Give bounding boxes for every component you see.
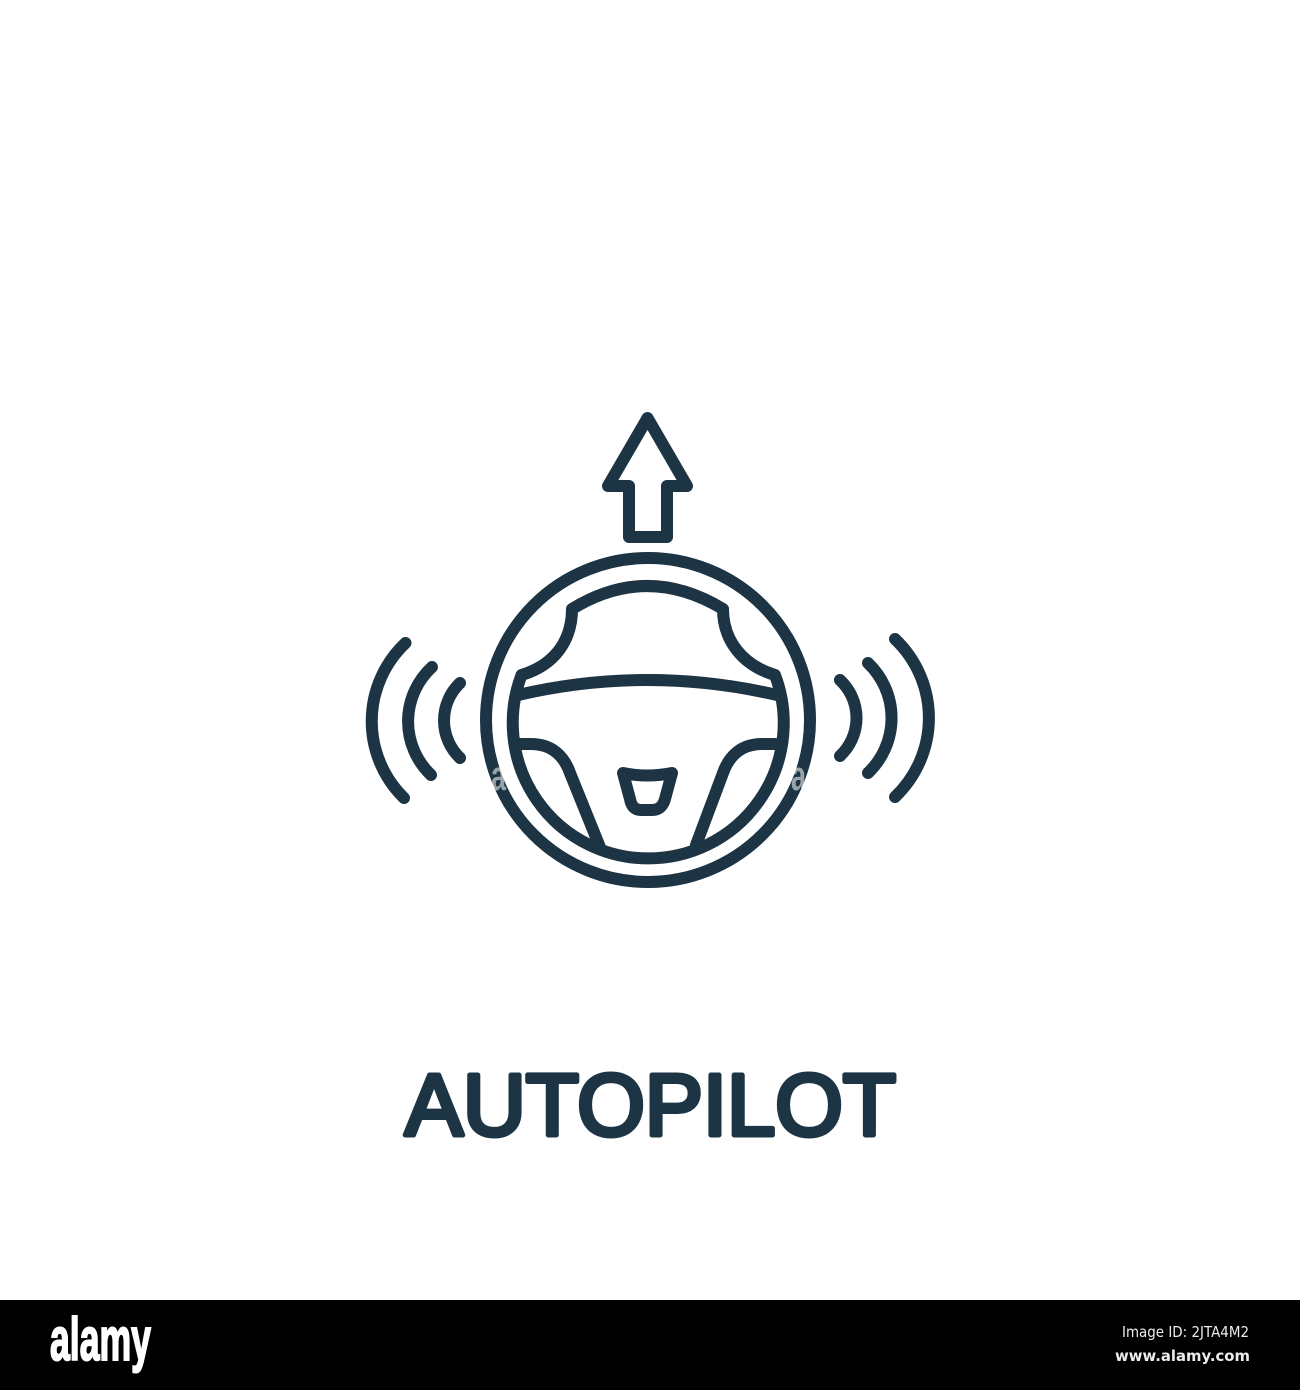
left spoke [518,744,600,846]
icon: autopilot steering wheel [372,418,929,882]
icon: up arrow [608,418,687,537]
watermark fragments: a [491,752,506,799]
right signal waves [840,639,929,797]
footer logo: alamy [50,1306,151,1373]
title: AUTOPILOT [405,1057,896,1154]
website: www.alamy.com [1115,1347,1250,1365]
wheel crossbar [518,680,777,695]
watermark fragments: a [791,752,806,799]
wheel inner hub [513,586,784,858]
left signal waves [372,643,460,798]
right spoke [696,744,775,845]
watermark fragments [491,752,806,799]
centre badge [623,773,672,810]
image id: Image ID: 2JTA4M2 [1122,1323,1249,1341]
footer bar [0,1300,1300,1390]
wheel outer rim [486,558,810,882]
